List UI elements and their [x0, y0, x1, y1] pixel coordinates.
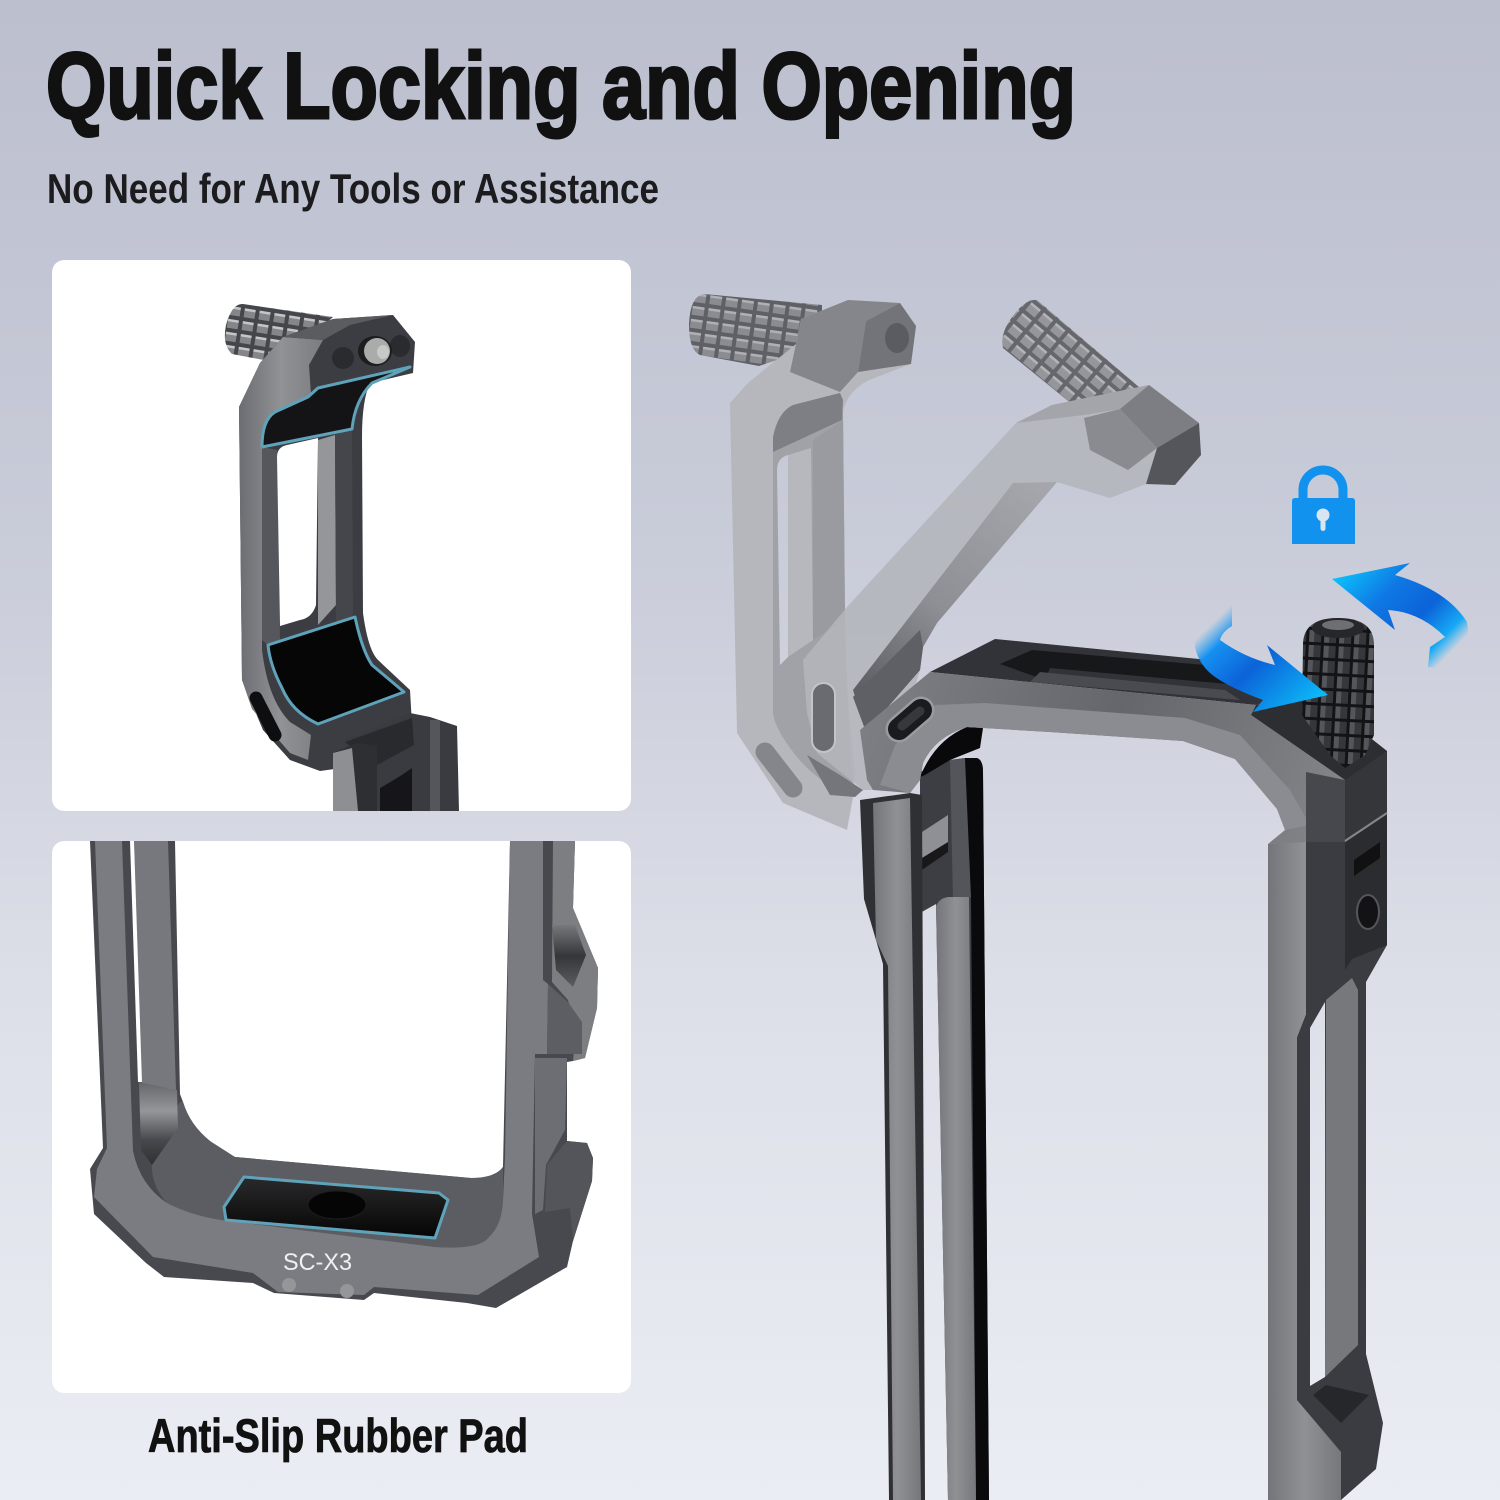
base pins	[282, 1278, 354, 1298]
main frame: left column	[860, 758, 989, 1500]
knob	[1002, 300, 1139, 409]
slot	[899, 710, 921, 729]
icon: knurled knob	[225, 304, 333, 363]
arm	[803, 385, 1201, 797]
top rubber pad	[262, 367, 410, 447]
caption: Anti-Slip Rubber Pad	[148, 1409, 528, 1462]
frame base	[90, 841, 598, 1308]
bottom rubber pad	[268, 617, 404, 724]
panel: rubber pads on top arm	[52, 260, 631, 811]
main frame: top bar	[860, 639, 1387, 844]
hinge	[333, 713, 459, 811]
subtitle: No Need for Any Tools or Assistance	[47, 165, 659, 212]
arrow: rotate clockwise	[1195, 605, 1328, 712]
main frame: right column	[1268, 812, 1387, 1500]
tripod screw hole	[308, 1191, 366, 1219]
model marking: SC-X3	[283, 1249, 352, 1276]
knob	[689, 294, 822, 366]
side slot	[256, 698, 275, 735]
base rubber pad	[224, 1177, 448, 1238]
side slot and screw hole	[1354, 842, 1380, 929]
screws	[332, 335, 410, 369]
arrow: rotate counter-clockwise	[1332, 563, 1468, 668]
title: Quick Locking and Opening	[46, 33, 1076, 138]
ghost arm: closed position	[689, 294, 916, 830]
arm	[730, 300, 916, 830]
main knurled knob	[1302, 618, 1374, 768]
ghost arm: opening position	[803, 300, 1201, 797]
panel: anti-slip pad on base	[52, 841, 631, 1393]
icon: blue padlock	[1292, 470, 1355, 544]
arm body	[239, 315, 415, 771]
